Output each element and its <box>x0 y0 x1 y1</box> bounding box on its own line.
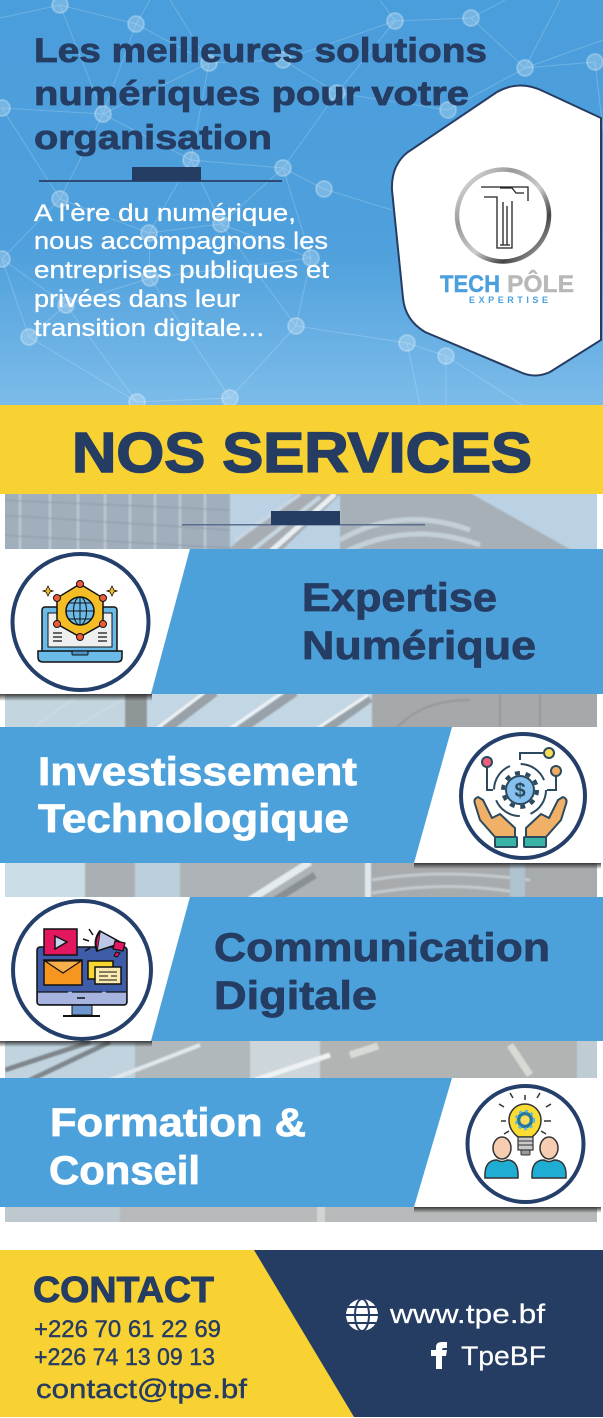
title <box>34 32 487 157</box>
heading band: nos services <box>0 405 603 494</box>
label: formation et conseil: Formation & <box>50 1101 306 1145</box>
label: investissement technologique: Technologique <box>38 797 349 841</box>
intro paragraph: privées dans leur <box>34 286 240 313</box>
strip one <box>5 494 230 549</box>
facebook handle: TpeBF <box>461 1341 546 1371</box>
icon: hands with gear: $ <box>514 780 526 802</box>
label: communication digitale: Communication <box>214 926 550 970</box>
contact block: contact@tpe.bf <box>36 1374 248 1404</box>
icon: globe <box>346 1299 378 1331</box>
title: Les meilleures solutions <box>34 32 487 70</box>
strip four <box>5 1042 136 1078</box>
label: expertise numerique: Expertise <box>302 576 497 620</box>
heading divider: top <box>39 167 282 182</box>
label: expertise numerique: Numérique <box>302 624 536 668</box>
intro paragraph: entreprises publiques et <box>34 257 329 284</box>
label: communication digitale: Digitale <box>214 974 377 1018</box>
label: investissement technologique <box>38 750 357 841</box>
intro paragraph: nous accompagnons les <box>34 228 328 255</box>
strip two <box>5 694 126 727</box>
contact block: +226 70 61 22 69 <box>34 1316 221 1343</box>
label: communication digitale <box>214 926 550 1018</box>
label: expertise numerique <box>302 576 536 668</box>
logo wordmark <box>440 270 574 305</box>
contact block: +226 74 13 09 13 <box>34 1344 215 1371</box>
title: organisation <box>34 119 272 157</box>
intro paragraph <box>34 200 329 342</box>
icon: monitor with media <box>13 901 151 1039</box>
icon: two people and light bulb <box>468 1086 584 1202</box>
logo mark: T in ring <box>457 170 549 262</box>
icon: facebook <box>431 1342 447 1369</box>
contact block <box>33 1269 248 1404</box>
label: investissement technologique: Investissement <box>38 750 357 794</box>
heading band: nos services: NOS SERVICES <box>72 421 532 485</box>
label: formation et conseil <box>49 1101 306 1193</box>
label: formation et conseil: Conseil <box>49 1149 200 1193</box>
logo wordmark: EXPERTISE <box>469 295 548 305</box>
contact block: CONTACT <box>33 1269 214 1310</box>
title: numériques pour votre <box>34 75 469 113</box>
header background with network pattern <box>0 0 603 410</box>
panel: expertise numerique <box>0 549 603 701</box>
strip five <box>5 1207 120 1222</box>
icon: laptop with globe network <box>12 554 148 690</box>
intro paragraph: A l'ère du numérique, <box>34 200 296 227</box>
building photo background <box>0 490 603 1226</box>
panel: investissement technologique <box>0 727 601 869</box>
intro paragraph: transition digitale... <box>34 315 264 342</box>
logo wordmark: PÔLE <box>507 270 574 298</box>
logo wordmark: TECH <box>440 271 500 298</box>
footer <box>0 1250 603 1417</box>
panel: formation et conseil <box>0 1078 601 1213</box>
strip three <box>5 863 86 897</box>
icon: hands with gear <box>461 734 585 858</box>
heading divider: services <box>182 511 425 526</box>
panel: communication digitale <box>0 897 603 1047</box>
logo panel <box>392 86 601 376</box>
website: www.tpe.bf <box>389 1299 546 1329</box>
